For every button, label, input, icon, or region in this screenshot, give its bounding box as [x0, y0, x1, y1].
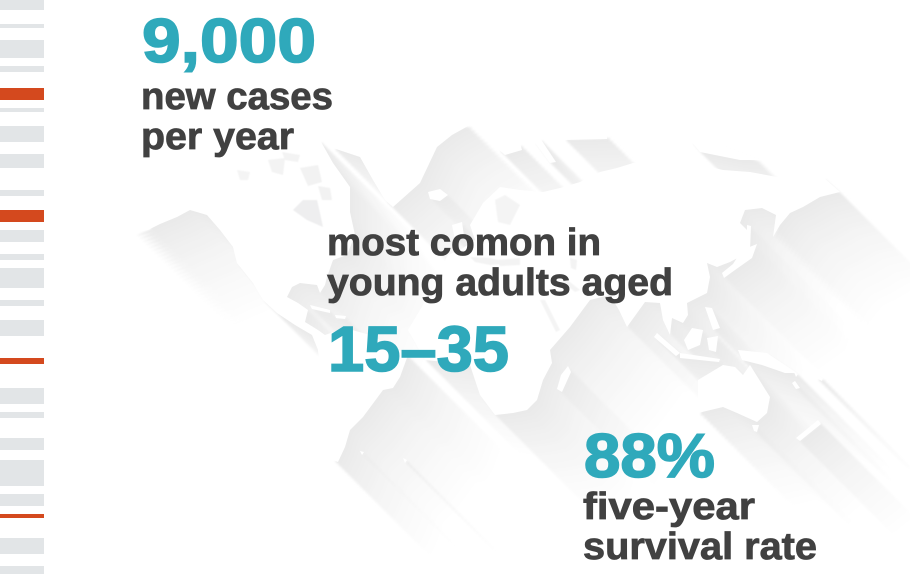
label: five-year: five-year: [583, 486, 755, 528]
label: new cases: new cases: [141, 76, 333, 118]
stat: 9,000 new cases per year: [141, 7, 333, 158]
sidebar: striped bars: [0, 0, 44, 574]
world map with long shadows: [133, 118, 910, 559]
number: 9,000: 9,000: [142, 7, 316, 76]
label: per year: per year: [141, 116, 294, 158]
label: survival rate: survival rate: [583, 526, 817, 568]
number: 15–35: 15–35: [328, 313, 509, 385]
label: most comon in: most comon in: [327, 222, 601, 264]
stat: most common age 15-35: [327, 222, 673, 385]
number: 88%: 88%: [584, 422, 715, 491]
land masses: [133, 118, 840, 463]
label: young adults aged: young adults aged: [327, 262, 673, 304]
stat: 88% five-year survival rate: [583, 422, 817, 568]
inland seas and bays: [237, 152, 580, 332]
